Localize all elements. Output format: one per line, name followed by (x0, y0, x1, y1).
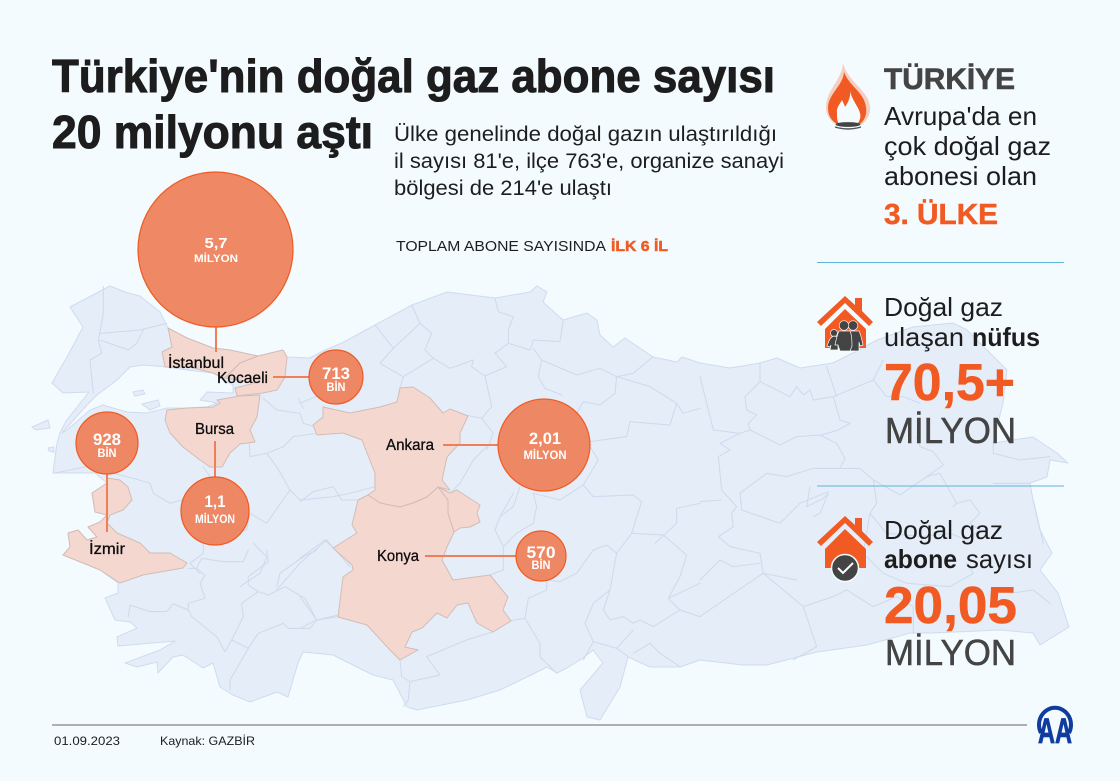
title: 20 milyonu aştı (52, 106, 373, 158)
bubble: Bursa 1,1 milyon: 1,1 (204, 493, 226, 511)
bubble: Ankara 2,01 milyon: Ankara (386, 437, 434, 454)
stat: Avrupa ranking: TÜRKİYE (884, 63, 1015, 96)
bubble: Bursa 1,1 milyon (181, 421, 249, 545)
stat: population: ulaşan (884, 322, 964, 352)
islands (32, 390, 160, 452)
bubble: Ankara 2,01 milyon: 2,01 (529, 430, 561, 448)
icon: house with family (817, 296, 873, 351)
stat: subscribers: Doğal gaz (884, 515, 1003, 545)
bubble: Kocaeli 713 bin: Kocaeli (217, 370, 268, 387)
bubble: İzmir 928 bin: İzmir (89, 539, 126, 558)
title: Türkiye'nin doğal gaz abone sayısı (52, 50, 775, 102)
stat: Avrupa ranking: çok doğal gaz (884, 131, 1051, 161)
bubble: Kocaeli 713 bin: BİN (326, 379, 346, 394)
stat: Avrupa ranking: abonesi olan (884, 161, 1037, 191)
stat: subscribers (884, 515, 1033, 673)
bubble: İzmir 928 bin (76, 412, 138, 558)
stat: population: 70,5+ (884, 354, 1015, 412)
bubble: Konya 570 bin: BİN (532, 557, 550, 572)
highlighted province: Bursa (165, 395, 260, 467)
bubble: Bursa 1,1 milyon: Bursa (195, 421, 234, 438)
icon: house with check (817, 516, 873, 582)
bubble: İzmir 928 bin: BİN (98, 445, 116, 460)
province borders: west (53, 287, 375, 590)
highlighted province: İzmir (63, 478, 187, 583)
highlighted province: İstanbul (162, 328, 258, 378)
bubble: Ankara 2,01 milyon (386, 399, 590, 491)
stat: population (884, 292, 1040, 451)
stat: population: MİLYON (885, 410, 1016, 451)
chart heading: İLK 6 İL (611, 238, 668, 255)
bubble: Bursa 1,1 milyon: MİLYON (195, 513, 235, 526)
bubble: Konya 570 bin: 570 (526, 544, 556, 562)
bubble: İstanbul 5,7 milyon: 5,7 (204, 235, 228, 252)
stat: Avrupa ranking (884, 63, 1051, 231)
stat: subscribers: abone (884, 544, 957, 574)
subtitle text: Ülke genelinde doğal gazın ulaştırıldığı (394, 123, 777, 146)
bubble: İstanbul 5,7 milyon (138, 172, 293, 372)
stat: population: nüfus (972, 322, 1040, 352)
province borders: east (700, 360, 1050, 660)
highlighted province: Konya (333, 487, 511, 660)
subtitle text (394, 123, 784, 200)
stat: population: Doğal gaz (884, 292, 1003, 322)
bubble: Kocaeli 713 bin: 713 (322, 365, 350, 383)
title (52, 50, 775, 158)
stat: Avrupa ranking: 3. ÜLKE (884, 198, 998, 231)
icon: gas flame (826, 63, 870, 129)
chart heading: TOPLAM ABONE SAYISINDA (396, 238, 606, 255)
stat: Avrupa ranking: Avrupa'da en (884, 101, 1037, 131)
highlighted province: Aksaray part (438, 487, 480, 532)
subtitle text: il sayısı 81'e, ilçe 763'e, organize sanayi (394, 150, 784, 173)
province borders: centre (300, 298, 700, 707)
sea of Marmara (62, 365, 233, 433)
logo: AA: AA (1038, 712, 1072, 751)
footer: Kaynak: GAZBİR (160, 734, 255, 748)
stat: subscribers: MİLYON (885, 632, 1016, 673)
subtitle text: bölgesi de 214'e ulaştı (394, 177, 612, 200)
map: Türkiye provinces (32, 286, 1069, 720)
bubble: Konya 570 bin (377, 531, 566, 581)
bubble: İstanbul 5,7 milyon: İstanbul (168, 353, 224, 372)
bubble: Kocaeli 713 bin (217, 350, 363, 404)
footer: 01.09.2023 (54, 734, 120, 748)
bubble: Ankara 2,01 milyon: MİLYON (524, 447, 566, 462)
bubble: İzmir 928 bin: 928 (93, 431, 121, 449)
bubble: Konya 570 bin: Konya (377, 548, 419, 565)
bubble: İstanbul 5,7 milyon: MİLYON (194, 252, 238, 265)
footer (52, 725, 1027, 748)
logo: AA (1038, 708, 1072, 751)
stat: subscribers: sayısı (966, 544, 1033, 574)
highlighted province: Kocaeli (225, 350, 287, 396)
highlighted province: Ankara (313, 387, 468, 507)
province borders: south-west (128, 550, 338, 690)
stat: subscribers: 20,05 (884, 577, 1017, 635)
